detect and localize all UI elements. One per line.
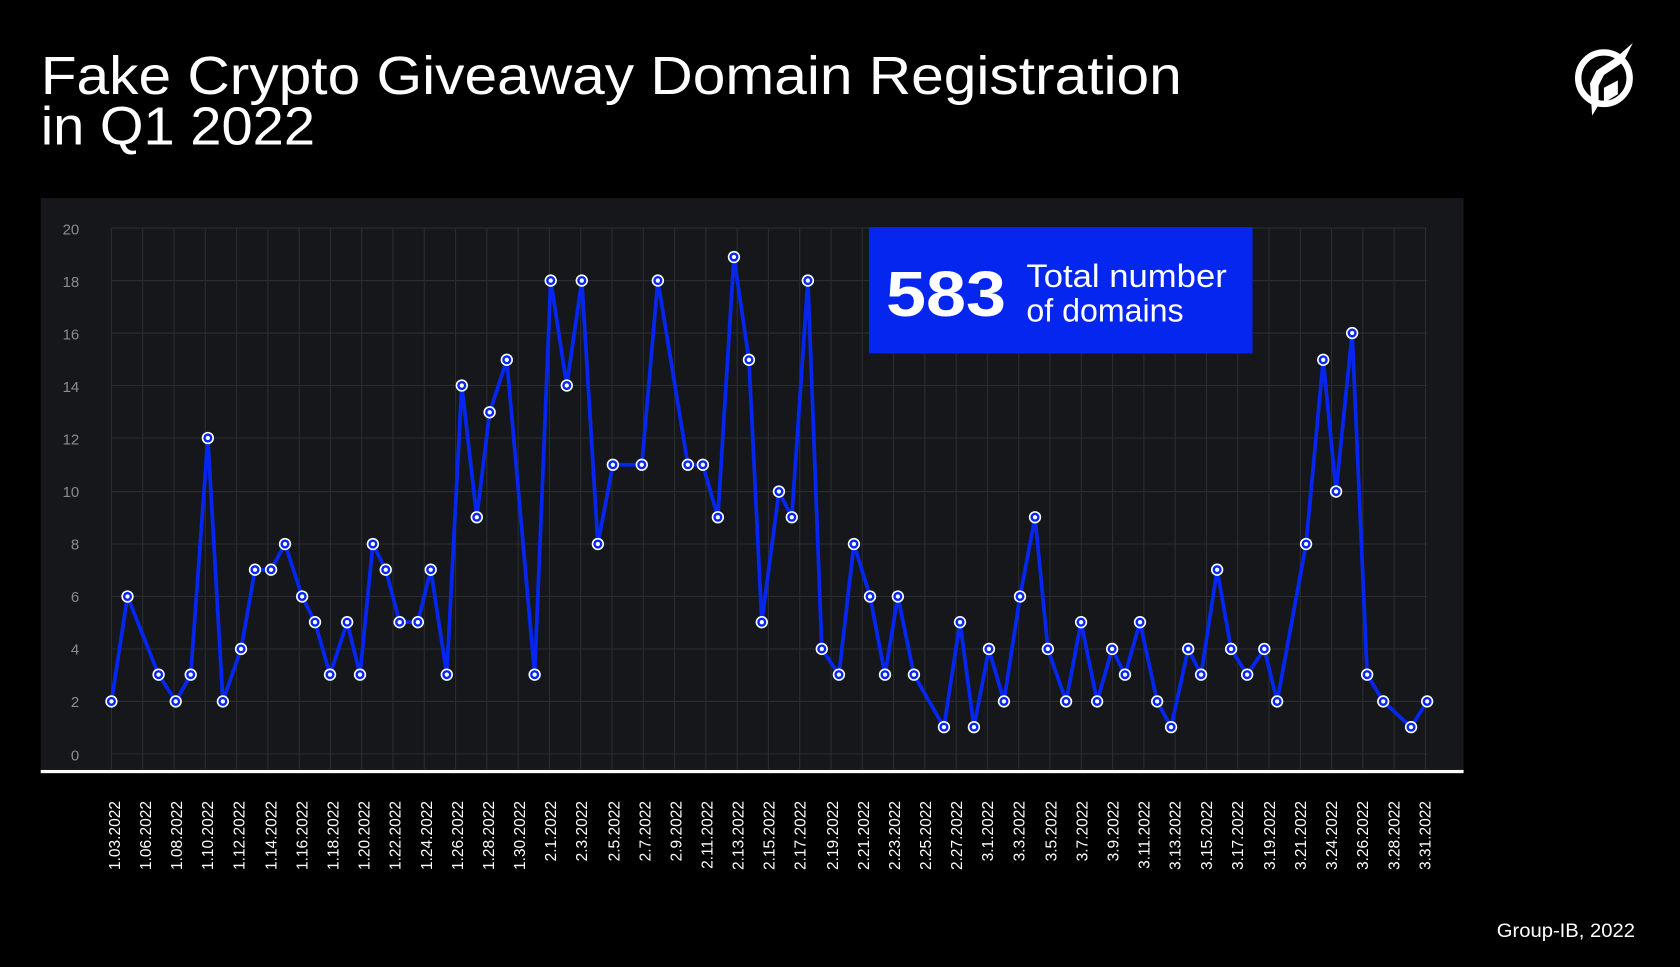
y-axis labels: 18 — [63, 274, 79, 291]
x-axis date labels: 3.1.2022 — [980, 801, 997, 861]
x-axis date labels: 2.21.2022 — [856, 801, 873, 870]
x-axis date labels: 2.15.2022 — [762, 801, 779, 870]
x-axis date labels: 3.28.2022 — [1386, 801, 1403, 870]
x-axis baseline — [41, 770, 1464, 773]
callout: total number of domains: of domains — [1026, 292, 1184, 328]
x-axis date labels: 3.11.2022 — [1137, 801, 1154, 869]
icon: Group-IB logo — [1578, 43, 1633, 116]
x-axis date labels: 2.11.2022 — [699, 801, 717, 869]
x-axis date labels: 1.20.2022 — [357, 801, 374, 870]
x-axis date labels: 1.30.2022 — [512, 801, 529, 870]
x-axis date labels: 2.7.2022 — [637, 801, 654, 861]
x-axis date labels: 2.1.2022 — [543, 801, 560, 861]
y-axis labels: 16 — [63, 326, 79, 343]
line series with markers — [111, 257, 1427, 727]
x-axis date labels: 3.21.2022 — [1293, 801, 1310, 870]
x-axis date labels: 3.3.2022 — [1011, 801, 1028, 861]
x-axis date labels: 2.9.2022 — [668, 801, 685, 861]
x-axis date labels: 1.06.2022 — [138, 801, 155, 870]
x-axis date labels: 3.24.2022 — [1324, 801, 1341, 870]
title — [41, 47, 1182, 157]
y-axis labels: 4 — [71, 641, 79, 658]
x-axis date labels: 3.13.2022 — [1168, 801, 1185, 870]
footer source: Group-IB, 2022 — [1497, 921, 1635, 942]
x-axis date labels: 1.24.2022 — [419, 801, 436, 870]
y-axis labels: 2 — [71, 694, 79, 711]
x-axis date labels: 1.14.2022 — [263, 801, 280, 870]
x-axis date labels: 2.13.2022 — [731, 801, 748, 870]
panel: chart — [41, 198, 1464, 771]
x-axis date labels: 3.17.2022 — [1230, 801, 1247, 870]
x-axis date labels: 3.15.2022 — [1199, 801, 1216, 870]
title: in Q1 2022 — [41, 98, 315, 157]
x-axis date labels: 2.3.2022 — [574, 801, 591, 861]
x-axis date labels: 2.23.2022 — [887, 801, 904, 870]
x-axis date labels — [107, 801, 1434, 870]
x-axis date labels: 1.10.2022 — [200, 801, 217, 870]
y-axis labels: 14 — [63, 379, 79, 396]
x-axis date labels: 2.5.2022 — [606, 801, 623, 861]
x-axis date labels: 1.28.2022 — [481, 801, 498, 870]
x-axis date labels: 1.16.2022 — [294, 801, 312, 870]
x-axis date labels: 3.7.2022 — [1074, 801, 1092, 861]
y-axis labels: 6 — [71, 589, 79, 606]
callout: total number of domains — [869, 227, 1252, 353]
x-axis date labels: 3.9.2022 — [1106, 801, 1123, 861]
y-axis labels — [63, 222, 79, 764]
y-axis labels: 0 — [71, 747, 79, 764]
y-axis labels: 12 — [63, 431, 79, 448]
x-axis date labels: 1.08.2022 — [169, 801, 186, 870]
x-axis date labels: 1.03.2022 — [107, 801, 124, 870]
x-axis date labels: 3.26.2022 — [1355, 801, 1372, 870]
y-axis labels: 10 — [63, 484, 79, 501]
x-axis date labels: 2.25.2022 — [918, 801, 935, 870]
x-axis date labels: 1.18.2022 — [326, 801, 343, 870]
callout: total number of domains: Total number — [1026, 258, 1227, 294]
x-axis date labels: 2.17.2022 — [793, 801, 810, 870]
x-axis date labels: 2.19.2022 — [825, 801, 842, 870]
x-axis date labels: 1.12.2022 — [231, 801, 248, 870]
x-axis date labels: 1.26.2022 — [450, 801, 467, 870]
x-axis date labels: 3.5.2022 — [1043, 801, 1060, 861]
x-axis date labels: 1.22.2022 — [388, 801, 405, 870]
y-axis labels: 8 — [71, 536, 79, 553]
callout: total number of domains: 583 — [886, 258, 1006, 330]
x-axis date labels: 2.27.2022 — [949, 801, 966, 870]
title: Fake Crypto Giveaway Domain Registration — [41, 47, 1182, 106]
x-axis date labels: 3.31.2022 — [1417, 801, 1434, 870]
x-axis date labels: 3.19.2022 — [1262, 801, 1279, 870]
y-axis labels: 20 — [63, 222, 79, 239]
